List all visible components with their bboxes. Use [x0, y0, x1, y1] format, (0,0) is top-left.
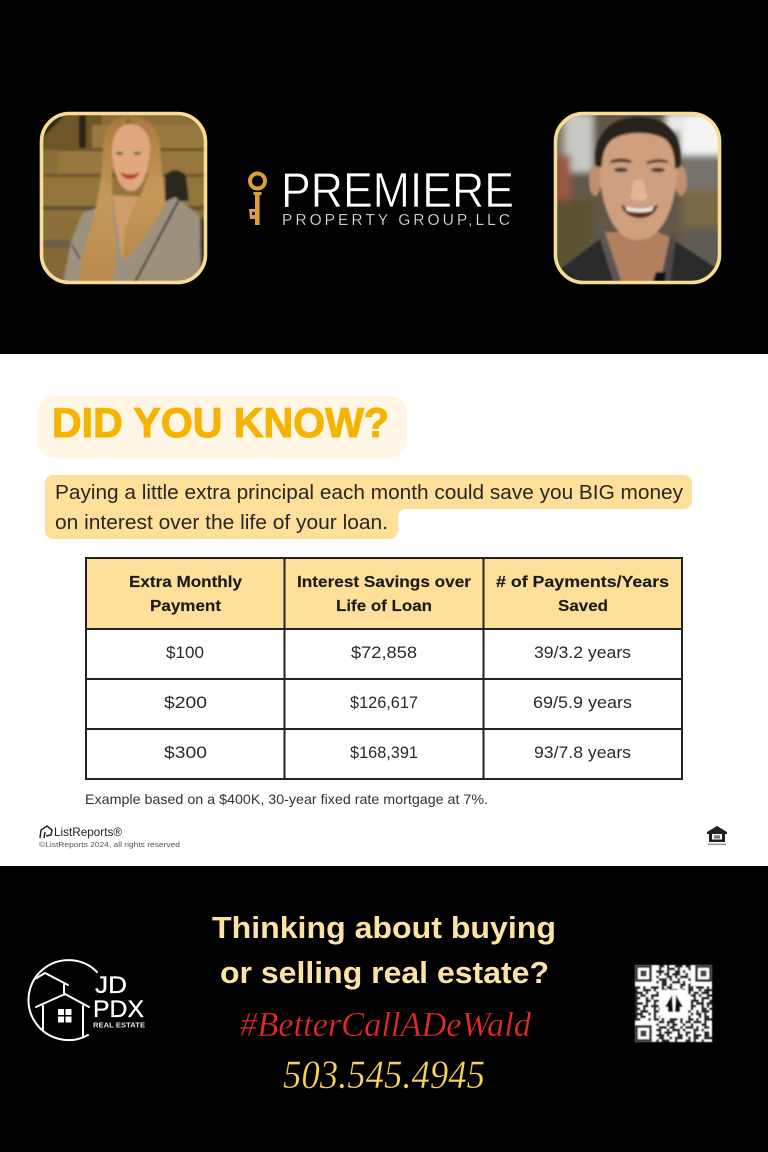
- table header row: Interest Savings over: [297, 574, 471, 591]
- logo: JD PDX Real Estate: REAL ESTATE: [93, 1020, 145, 1030]
- photo: male agent portrait: [553, 112, 725, 284]
- white content panel: [0, 354, 768, 866]
- table row: $100: [166, 643, 631, 662]
- intro text highlight: on interest over the life of your loan.: [55, 512, 388, 534]
- table row: $300: 93/7.8 years: [534, 743, 631, 762]
- heading: did you know: DID YOU KNOW?: [52, 399, 389, 446]
- call to action heading: Thinking about buying: [212, 910, 556, 945]
- icon: house in circle: [29, 960, 97, 1040]
- table header row: Extra Monthly: [129, 574, 242, 591]
- table header row: Life of Loan: [336, 598, 432, 615]
- table row: $300: [164, 743, 631, 762]
- table row: $200: $200: [164, 693, 207, 712]
- table header row: Payment: [150, 598, 222, 615]
- savings table: [86, 558, 682, 779]
- call to action heading: or selling real estate?: [220, 955, 549, 990]
- logo wordmark: PREMIERE: [281, 164, 514, 218]
- icon: gold key: [249, 174, 265, 225]
- table row: $300: $168,391: [350, 743, 418, 762]
- call to action heading: [212, 910, 556, 990]
- table row: $200: $126,617: [350, 693, 418, 712]
- hashtag: #BetterCallADeWald: [240, 1005, 531, 1044]
- icon: equal housing: [707, 826, 727, 845]
- logo: JD PDX Real Estate: [29, 960, 145, 1040]
- icon: ListReports house: [40, 826, 52, 838]
- logo subtitle: PROPERTY GROUP,LLC: [282, 212, 510, 229]
- table row: $300: $300: [164, 743, 207, 762]
- QR code: [635, 965, 712, 1042]
- footnote: Example based on a $400K, 30-year fixed rate mortgage at 7%.: [85, 791, 488, 807]
- table row: $100: $100: [166, 643, 204, 662]
- icon: QR center arrows: [665, 995, 683, 1012]
- logo: Premiere Property Group: [249, 164, 514, 229]
- phone number: 503.545.4945: [283, 1052, 485, 1097]
- table header row: [129, 574, 669, 615]
- table row: $200: 69/5.9 years: [533, 693, 632, 712]
- logo: JD PDX Real Estate: JD: [95, 972, 127, 999]
- logo: JD PDX Real Estate: PDX: [93, 996, 144, 1023]
- table row: $100: 39/3.2 years: [534, 643, 631, 662]
- ListReports credit: ©ListReports 2024, all rights reserved: [39, 840, 180, 849]
- photo: woman agent portrait: [40, 112, 207, 285]
- table header row: # of Payments/Years: [496, 574, 669, 591]
- bottom black banner: [0, 866, 768, 1152]
- table header row: Saved: [558, 598, 608, 615]
- intro text highlight: [45, 475, 692, 539]
- table row: $100: $72,858: [351, 643, 417, 662]
- intro text highlight: Paying a little extra principal each month could save you BIG money: [55, 482, 683, 504]
- table row: $200: [164, 693, 632, 712]
- ListReports credit: [39, 825, 180, 849]
- top black banner: [0, 0, 768, 354]
- ListReports credit: ListReports®: [54, 825, 122, 839]
